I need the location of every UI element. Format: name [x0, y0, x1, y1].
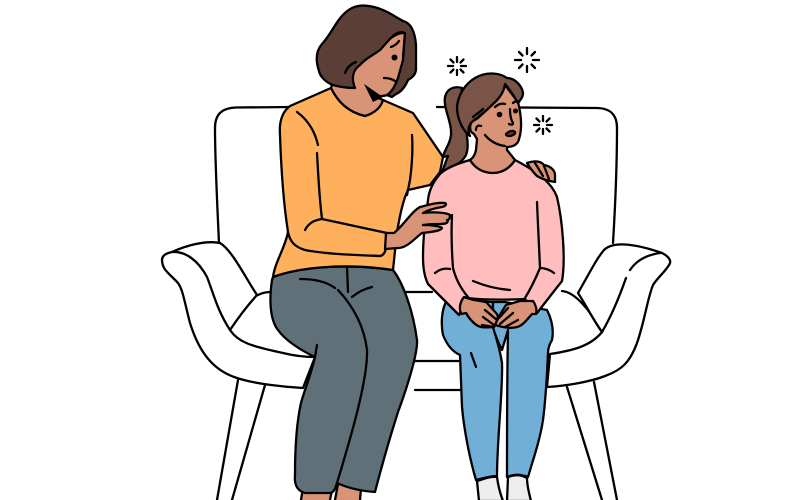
jeans detail: [471, 353, 476, 367]
daughter: [423, 73, 564, 500]
right sock: [507, 475, 531, 500]
daughter sweater folds: [435, 202, 554, 298]
mother: [270, 6, 443, 500]
mother neck and face: [331, 33, 406, 116]
sweater details: [297, 112, 412, 219]
finger lines on shoulder: [535, 163, 549, 179]
mother trousers: [270, 266, 417, 493]
sofa: [162, 107, 670, 500]
sofa seat outline: [230, 291, 602, 332]
sparkle: lower right: [534, 116, 552, 134]
ponytail: [442, 87, 468, 172]
daughter sweater: [423, 160, 564, 315]
mother hand on daughter's shoulder: [527, 161, 555, 182]
mother forearm sleeve: [288, 219, 387, 256]
left armrest inner curve: [172, 252, 230, 330]
mother hand on daughter's arm: [385, 203, 450, 249]
daughter jeans right leg: [493, 302, 553, 477]
daughter jeans left leg: [442, 300, 502, 480]
sofa back: [215, 108, 617, 330]
trouser creases: [300, 267, 372, 483]
sofa front rail: [415, 361, 462, 390]
sofa legs: [217, 380, 617, 500]
mother hands: [385, 161, 555, 249]
daughter hands: [460, 297, 536, 328]
sparkle: left: [448, 57, 466, 75]
mother ankle lines: [301, 484, 361, 500]
sparkle: top right: [515, 48, 539, 72]
mother sweater: [273, 88, 443, 277]
daughter neck and face: [470, 85, 521, 173]
right armrest inner curve: [602, 253, 660, 332]
right armrest: [547, 244, 670, 387]
sofa back outline: [215, 107, 617, 243]
left armrest: [162, 242, 315, 388]
sofa seat: [230, 291, 602, 390]
left sock: [477, 477, 503, 500]
mother facial features: [345, 41, 399, 102]
mother hair: [317, 6, 416, 97]
mother ankles: [301, 484, 362, 500]
daughter hair: [457, 73, 523, 136]
daughter facial features: [473, 101, 519, 146]
